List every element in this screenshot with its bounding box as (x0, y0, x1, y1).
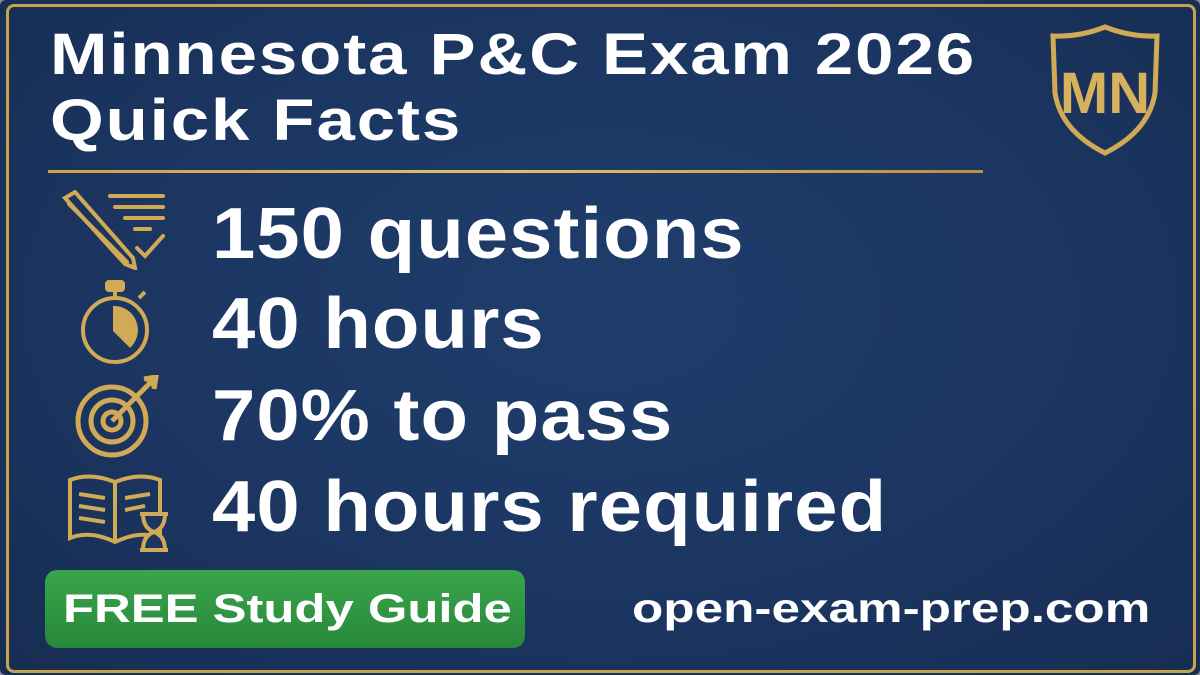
icon: stopwatch (81, 280, 149, 364)
title (50, 22, 976, 153)
title: Minnesota P&C Exam 2026 (50, 22, 976, 87)
item: 40 hours required: 40 hours required (212, 467, 887, 547)
item: 150 questions: 150 questions (212, 194, 745, 274)
url: open-exam-prep.com (632, 585, 1150, 631)
item: 70% to pass: 70% to pass (212, 376, 673, 456)
button: FREE Study Guide: FREE Study Guide (63, 587, 512, 631)
icon: target (76, 375, 159, 458)
icon: book with hourglass (68, 474, 168, 552)
item: 40 hours: 40 hours (212, 284, 545, 364)
title: Quick Facts (50, 88, 462, 153)
badge: MN shield: MN (1060, 61, 1150, 126)
icon: pencil checklist (62, 190, 166, 270)
button: FREE Study Guide (45, 570, 525, 648)
badge: MN shield (1050, 24, 1160, 156)
